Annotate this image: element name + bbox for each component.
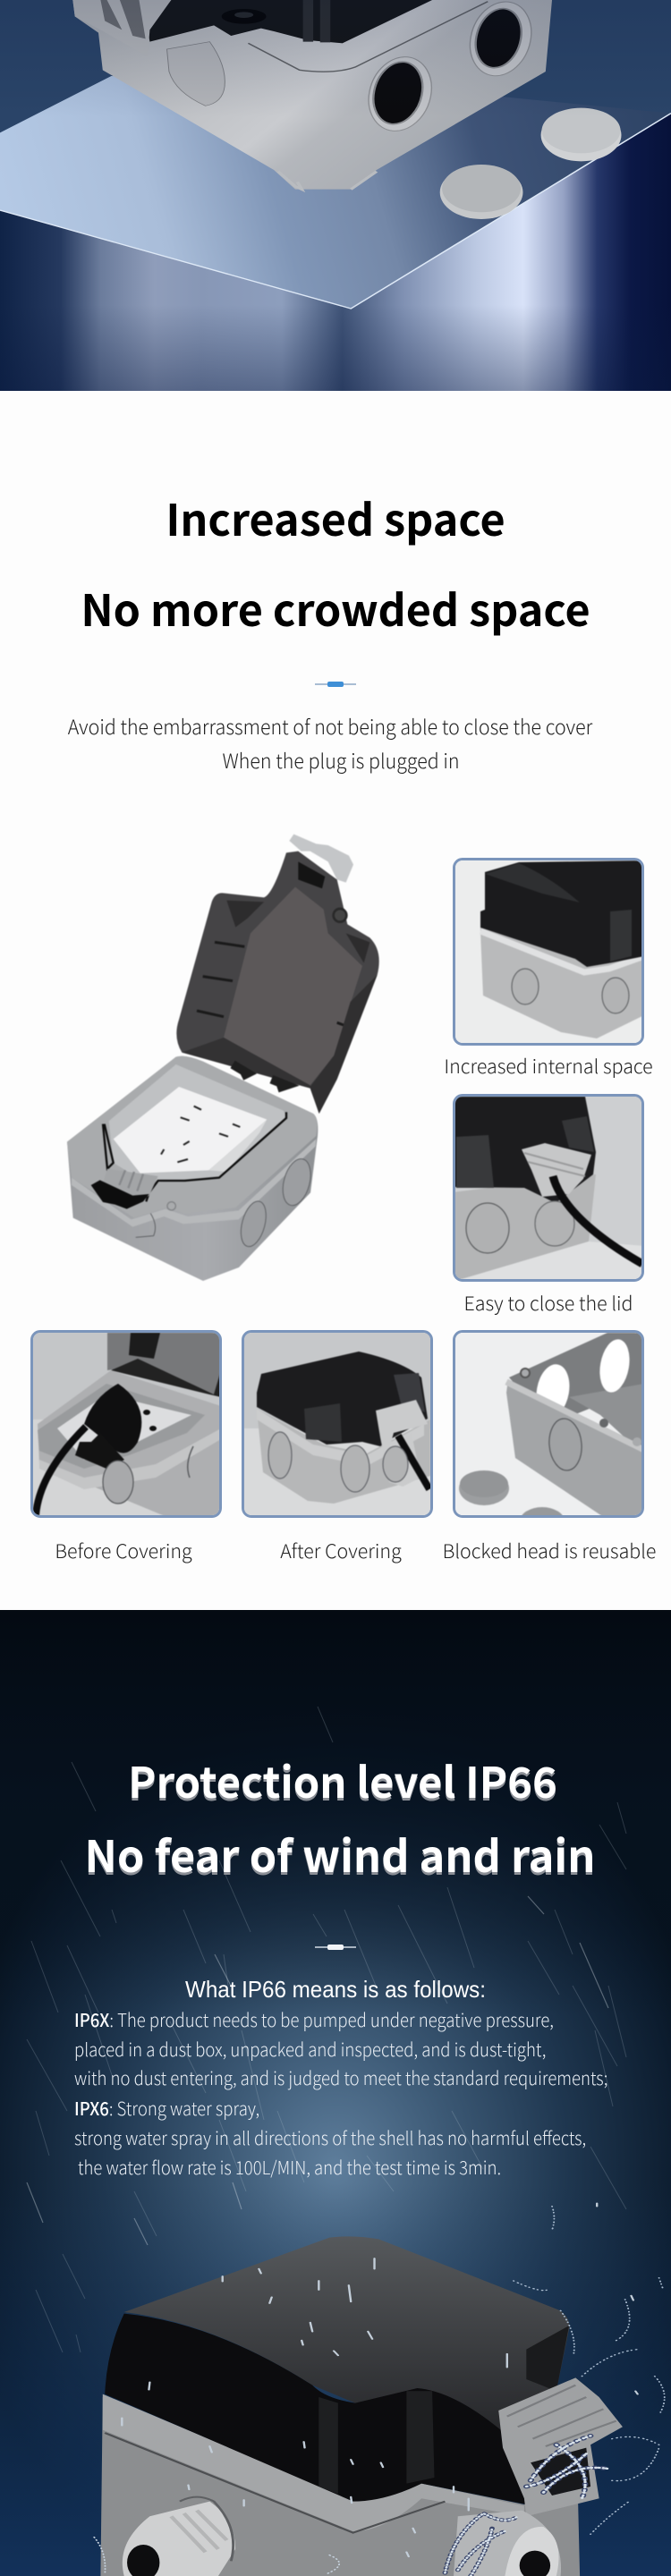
lid front [105,2314,526,2504]
blanking plugs [440,165,522,219]
thumbnail: blocked head is reusable [453,1330,644,1518]
product in rain [94,2203,665,2576]
caption: increased internal space: Increased internal space [444,1052,653,1080]
knockouts [278,1156,315,1208]
lid [176,835,379,1114]
IPX6 text line 3: the water flow rate is 100L/MIN, and the test time is 3min. [78,2153,501,2180]
water splashes [94,2203,665,2576]
hero: product on glass shelf [0,0,671,391]
heading: no more crowded space: No more crowded space [81,576,590,639]
subheading: What IP66 means is as follows: [185,1976,486,2003]
latch top-left [72,0,171,56]
IPX6 text line 1: IPX6: Strong water spray, [74,2094,259,2121]
divider: white [315,1946,356,1948]
IP66 explanation text [74,1976,607,2180]
thumbnail: increased internal space [453,858,644,1046]
caption: after covering: After Covering [280,1537,402,1564]
thumbnail: easy to close the lid [453,1094,644,1282]
lid top [124,2236,570,2433]
main product image: open socket box [66,834,379,1281]
thumbnail: before covering [30,1330,222,1518]
IPX6 text line 2: strong water spray in all directions of the shell has no harmful effects, [74,2123,586,2150]
cable glands [123,2502,235,2576]
caption: easy to close the lid: Easy to close the lid [464,1289,633,1317]
dark lid [148,0,432,43]
knockout on left side [167,42,225,106]
body [100,2397,580,2576]
IP6X text line 1: IP6X: The product needs to be pumped under negative pressure, [74,2005,554,2032]
heading: increased space: Increased space [166,486,505,548]
heading: no fear of wind and rain: No fear of wind and rain [85,1823,595,1885]
divider: blue [315,683,356,685]
subtitle line 1: Avoid the embarrassment of not being able to close the cover [68,712,592,741]
thumbnail: after covering [242,1330,433,1518]
caption: blocked head is reusable: Blocked head is reusable [443,1537,656,1564]
dark section: rain background and product [0,1610,671,2576]
holes [362,54,438,134]
caption: before covering: Before Covering [55,1537,192,1564]
latch [498,2377,623,2516]
box body [72,0,552,190]
black latch [91,1180,149,1209]
subtitle line 2: When the plug is plugged in [222,746,460,775]
socket body [67,1056,318,1281]
heading: protection level IP66: Protection level IP66 [128,1749,557,1810]
rain streaks [27,1707,626,2352]
IP6X text line 2: placed in a dust box, unpacked and inspected, and is dust-tight, [74,2035,546,2062]
IP6X text line 3: with no dust entering, and is judged to meet the standard requirements; [74,2063,607,2090]
